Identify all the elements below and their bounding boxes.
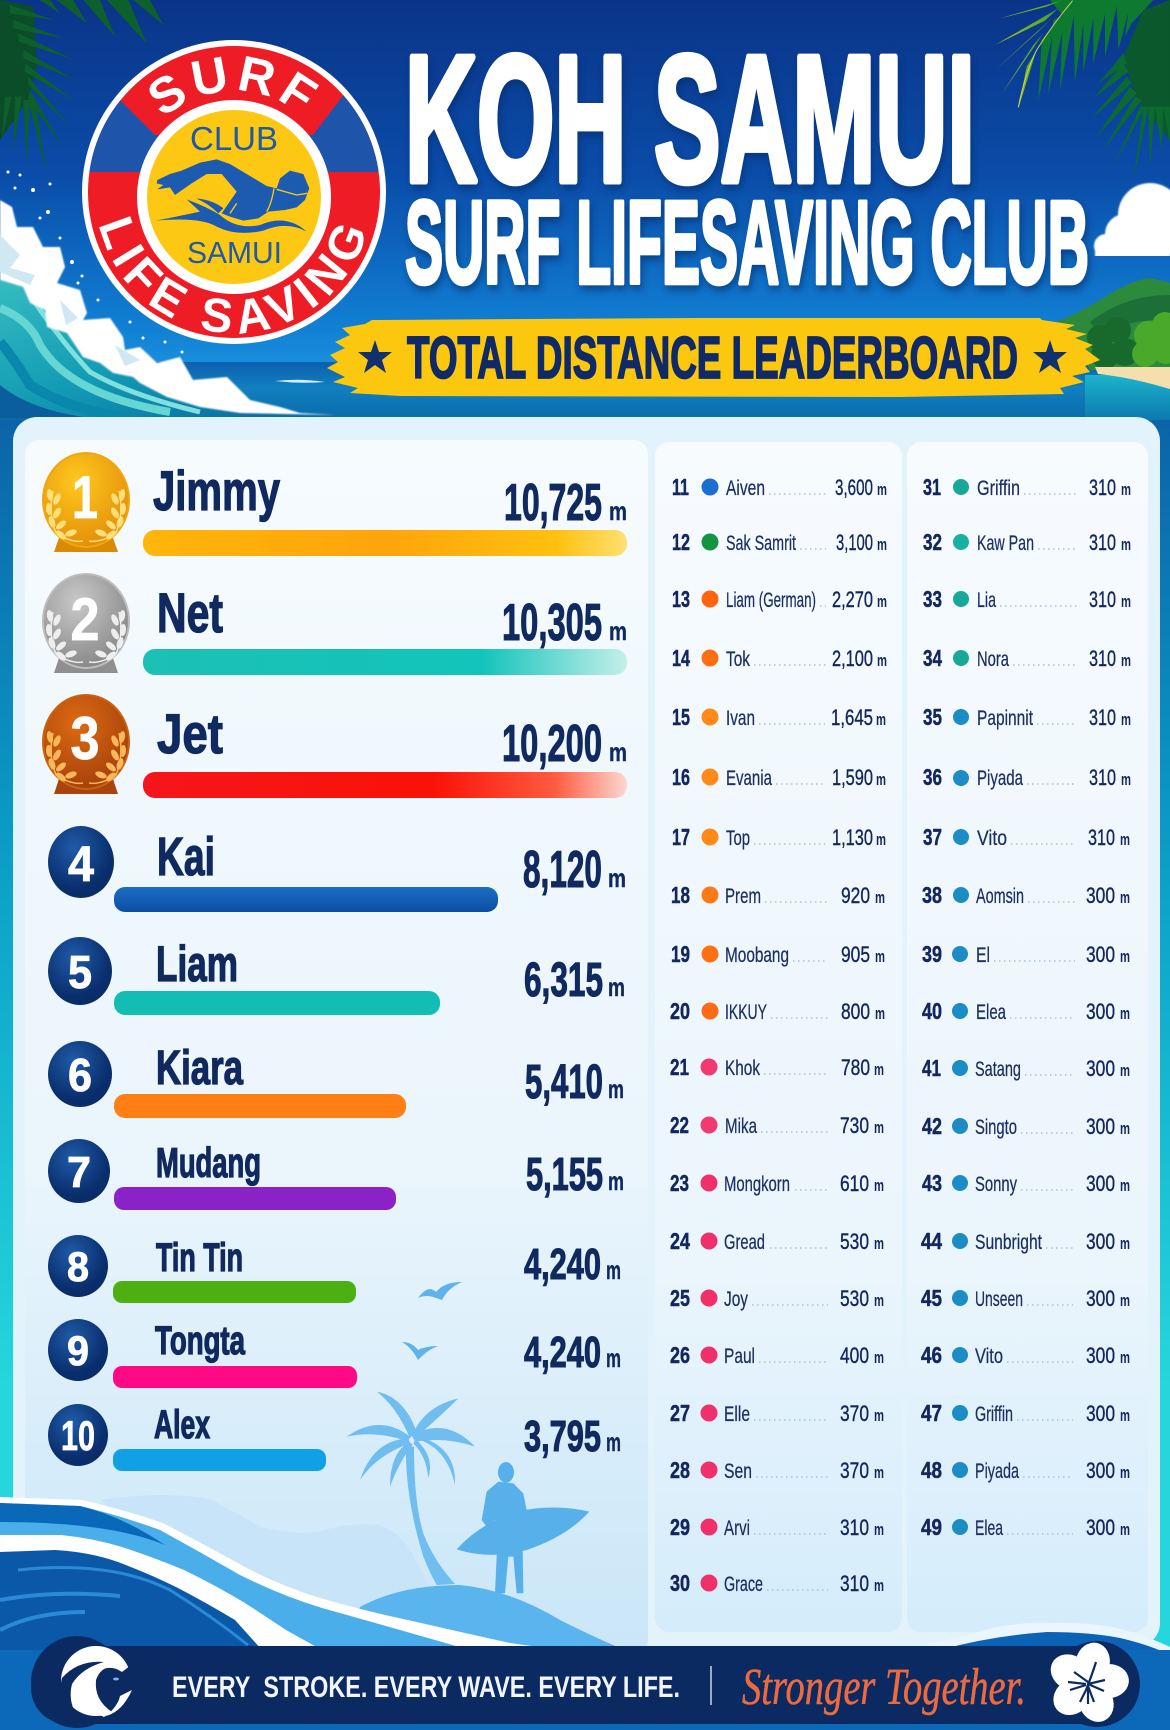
row 30 Grace: 310 xyxy=(840,1571,869,1596)
row 35 Papinnit: 310 xyxy=(1089,705,1116,730)
row 27 Elle: m xyxy=(874,1406,884,1425)
row 48 Piyada: 48 xyxy=(921,1457,942,1483)
silhouette: palm tree xyxy=(347,1392,475,1585)
row 11 Aiven: Aiven xyxy=(726,477,765,500)
row 23 Mongkorn: m xyxy=(874,1176,884,1195)
row 44 Sunbright: 300 xyxy=(1086,1229,1115,1254)
row 25 Joy: 25 xyxy=(670,1285,690,1311)
icon: swimmer xyxy=(156,159,309,233)
star left xyxy=(358,340,392,373)
player row: rank 9 Tongta xyxy=(48,1319,621,1388)
icon: birds xyxy=(402,1282,462,1360)
player row: Jet: m xyxy=(609,737,627,767)
row 28 Sen xyxy=(670,1457,884,1483)
row 29 Arvi: m xyxy=(874,1520,884,1539)
row 28 Sen: 370 xyxy=(840,1458,869,1483)
row 12 Sak Samrit: m xyxy=(877,535,887,554)
row 18 Prem xyxy=(671,882,885,908)
row 40 Elea xyxy=(922,998,1130,1024)
icon: wave logo xyxy=(61,1646,140,1718)
row 20 IKKUY: 800 xyxy=(841,999,870,1024)
row 38 Aomsin: Aomsin xyxy=(976,885,1024,908)
player row: rank 9 Tongta: m xyxy=(606,1343,621,1373)
row 24 Gread: Gread xyxy=(724,1231,765,1254)
row 33 Lia: m xyxy=(1121,592,1131,611)
row 39 El: 39 xyxy=(922,941,942,967)
row 39 El: 300 xyxy=(1086,942,1115,967)
row 12 Sak Samrit: 3,100 xyxy=(836,530,873,555)
row 26 Paul xyxy=(670,1342,884,1368)
medal: silver rank 2 xyxy=(43,574,129,673)
player row: rank 9 Tongta: Tongta xyxy=(155,1319,246,1363)
row 13 Liam (German): m xyxy=(877,592,887,611)
row 16 Evania: m xyxy=(876,770,886,789)
row 42 Singto: m xyxy=(1120,1119,1130,1138)
banner: total distance leaderboard xyxy=(327,318,1100,397)
row 38 Aomsin: m xyxy=(1120,888,1130,907)
row 29 Arvi xyxy=(670,1514,884,1540)
player row: rank 9 Tongta: 4,240 xyxy=(524,1328,601,1377)
row 42 Singto: Singto xyxy=(975,1116,1017,1139)
row 21 Khok: m xyxy=(874,1060,884,1079)
row 16 Evania: 1,590 xyxy=(832,765,873,790)
player row: rank 8 Tin Tin: 8 xyxy=(67,1243,89,1290)
row 25 Joy: m xyxy=(874,1291,884,1310)
row 26 Paul: m xyxy=(874,1348,884,1367)
row 34 Nora: Nora xyxy=(977,648,1009,671)
row 24 Gread xyxy=(670,1228,884,1254)
row 25 Joy: 530 xyxy=(840,1286,869,1311)
row 21 Khok: 21 xyxy=(670,1054,689,1080)
row 15 Ivan xyxy=(672,704,886,730)
row 18 Prem: 920 xyxy=(841,883,870,908)
row 44 Sunbright: m xyxy=(1120,1234,1130,1253)
row 19 Moobang: m xyxy=(875,947,885,966)
row 32 Kaw Pan: 310 xyxy=(1089,530,1116,555)
row 44 Sunbright: 44 xyxy=(921,1228,942,1254)
player row: rank 10 Alex: Alex xyxy=(154,1403,210,1447)
row 24 Gread: 530 xyxy=(840,1229,869,1254)
row 13 Liam (German): 13 xyxy=(672,586,690,612)
row 28 Sen: m xyxy=(874,1463,884,1482)
row 25 Joy: Joy xyxy=(724,1288,748,1311)
row 35 Papinnit: Papinnit xyxy=(977,707,1033,730)
row 43 Sonny xyxy=(922,1170,1130,1196)
player row: rank 6 Kiara: 5,410 xyxy=(525,1056,603,1109)
player row: rank 6 Kiara: m xyxy=(608,1074,624,1104)
footer slogan: EVERY STROKE. EVERY WAVE. EVERY LIFE. xyxy=(172,1671,680,1704)
list rows: ranks 11 to 30 xyxy=(670,474,887,1596)
player row: Jet xyxy=(143,702,627,798)
row 19 Moobang: Moobang xyxy=(725,944,789,967)
row 45 Unseen: 300 xyxy=(1086,1286,1115,1311)
row 24 Gread: 24 xyxy=(670,1228,690,1254)
row 37 Vito: Vito xyxy=(977,827,1007,850)
row 31 Griffin: 31 xyxy=(923,474,941,500)
row 42 Singto: 300 xyxy=(1086,1114,1115,1139)
row 13 Liam (German): Liam (German) xyxy=(726,589,816,612)
player row: rank 5 Liam: m xyxy=(608,972,625,1002)
row 45 Unseen: m xyxy=(1120,1291,1130,1310)
row 12 Sak Samrit xyxy=(672,529,887,555)
row 45 Unseen xyxy=(921,1285,1130,1311)
row 27 Elle: 27 xyxy=(670,1400,690,1426)
row 19 Moobang: 19 xyxy=(671,941,690,967)
row 26 Paul: 26 xyxy=(670,1342,690,1368)
list rows: ranks 31 to 49 xyxy=(921,474,1131,1540)
player row: rank 4 Kai xyxy=(48,826,626,912)
row 44 Sunbright: Sunbright xyxy=(975,1231,1042,1254)
row 46 Vito: Vito xyxy=(975,1345,1003,1368)
row 33 Lia: Lia xyxy=(977,589,996,612)
row 16 Evania: 16 xyxy=(672,764,690,790)
row 18 Prem: m xyxy=(875,888,885,907)
row 47 Griffin: 300 xyxy=(1086,1401,1115,1426)
row 14 Tok: Tok xyxy=(726,648,750,671)
row 33 Lia xyxy=(923,586,1131,612)
player row: rank 8 Tin Tin: Tin Tin xyxy=(156,1236,243,1280)
medal: gold rank 1 xyxy=(43,453,129,552)
row 47 Griffin: Griffin xyxy=(975,1403,1013,1426)
row 15 Ivan: m xyxy=(876,710,886,729)
row 42 Singto: 42 xyxy=(922,1113,942,1139)
row 24 Gread: m xyxy=(874,1234,884,1253)
row 30 Grace: m xyxy=(874,1576,884,1595)
player row: Net xyxy=(143,581,627,675)
player row: rank 5 Liam: 5 xyxy=(68,946,92,998)
row 23 Mongkorn xyxy=(670,1170,884,1196)
silhouette: surfer with board xyxy=(457,1462,589,1593)
row 36 Piyada: Piyada xyxy=(977,767,1023,790)
row 41 Satang: Satang xyxy=(975,1058,1021,1081)
row 17 Top: Top xyxy=(726,827,750,850)
row 12 Sak Samrit: 12 xyxy=(672,529,690,555)
player row: rank 10 Alex: 3,795 xyxy=(524,1412,601,1461)
row 13 Liam (German) xyxy=(672,586,887,612)
player row: Jimmy xyxy=(143,459,627,556)
row 47 Griffin xyxy=(921,1400,1130,1426)
cloud xyxy=(1094,183,1170,260)
row 23 Mongkorn: 23 xyxy=(670,1170,689,1196)
player row: rank 4 Kai: m xyxy=(608,863,626,893)
logo ring text: surf: SURF xyxy=(150,56,319,113)
row 39 El: m xyxy=(1120,947,1130,966)
player row: rank 7 Mudang: 5,155 xyxy=(526,1148,603,1200)
row 15 Ivan: 15 xyxy=(672,704,690,730)
row 11 Aiven xyxy=(672,474,887,500)
row 31 Griffin: Griffin xyxy=(977,477,1020,500)
player row: Jimmy: Jimmy xyxy=(153,459,280,522)
row 23 Mongkorn: Mongkorn xyxy=(724,1173,790,1196)
row 45 Unseen: Unseen xyxy=(975,1288,1023,1311)
row 34 Nora: 310 xyxy=(1089,646,1116,671)
row 27 Elle: 370 xyxy=(840,1401,869,1426)
row 26 Paul: Paul xyxy=(724,1345,755,1368)
row 28 Sen: Sen xyxy=(724,1460,752,1483)
row 22 Mika: Mika xyxy=(725,1115,757,1138)
player row: rank 10 Alex: 10 xyxy=(61,1412,95,1459)
row 16 Evania: Evania xyxy=(726,767,772,790)
row 42 Singto xyxy=(922,1113,1130,1139)
row 17 Top: 17 xyxy=(672,824,690,850)
row 17 Top xyxy=(672,824,886,850)
row 48 Piyada: Piyada xyxy=(975,1460,1019,1483)
panel: top ten xyxy=(25,440,648,1655)
row 48 Piyada: 300 xyxy=(1086,1458,1115,1483)
row 43 Sonny: 43 xyxy=(922,1170,942,1196)
silhouette: island xyxy=(340,1585,625,1650)
player row: rank 8 Tin Tin xyxy=(48,1235,621,1303)
row 46 Vito xyxy=(921,1342,1130,1368)
player row: rank 10 Alex: m xyxy=(606,1427,621,1457)
scene: distant hills xyxy=(100,1495,560,1650)
player row: rank 6 Kiara: Kiara xyxy=(156,1042,243,1095)
row 19 Moobang xyxy=(671,941,885,967)
player row: rank 8 Tin Tin: m xyxy=(606,1255,621,1285)
player row: rank 4 Kai: 8,120 xyxy=(523,841,602,899)
row 37 Vito: 310 xyxy=(1088,825,1115,850)
row 35 Papinnit: 35 xyxy=(923,704,942,730)
row 32 Kaw Pan: 32 xyxy=(923,529,942,555)
row 33 Lia: 33 xyxy=(923,586,942,612)
row 37 Vito: 37 xyxy=(923,824,942,850)
row 49 Elea: 49 xyxy=(921,1514,942,1540)
row 36 Piyada: m xyxy=(1121,770,1131,789)
row 25 Joy xyxy=(670,1285,884,1311)
palm fronds: top right xyxy=(995,0,1170,182)
row 46 Vito: m xyxy=(1120,1348,1130,1367)
row 49 Elea: m xyxy=(1120,1520,1130,1539)
player row: rank 6 Kiara: 6 xyxy=(68,1049,92,1101)
row 26 Paul: 400 xyxy=(840,1343,869,1368)
row 32 Kaw Pan: Kaw Pan xyxy=(977,532,1034,555)
row 32 Kaw Pan: m xyxy=(1121,535,1131,554)
island hill xyxy=(1057,278,1170,389)
club logo xyxy=(82,40,386,344)
row 20 IKKUY xyxy=(670,998,885,1024)
player row: rank 7 Mudang: Mudang xyxy=(156,1139,261,1186)
row 41 Satang: m xyxy=(1120,1061,1130,1080)
player row: Jimmy: m xyxy=(609,496,627,526)
player row: rank 5 Liam: 6,315 xyxy=(524,954,603,1007)
player row: rank 5 Liam: Liam xyxy=(156,936,238,992)
row 22 Mika: m xyxy=(874,1118,884,1137)
row 15 Ivan: Ivan xyxy=(726,707,755,730)
player row: Net: Net xyxy=(157,581,223,644)
player row: Net: m xyxy=(609,616,627,646)
row 48 Piyada: m xyxy=(1120,1463,1130,1482)
row 31 Griffin xyxy=(923,474,1131,500)
panel: outer board xyxy=(13,417,1160,1655)
row 29 Arvi: 310 xyxy=(840,1515,869,1540)
row 21 Khok: 780 xyxy=(841,1055,870,1080)
row 29 Arvi: Arvi xyxy=(724,1517,750,1540)
sea horizon xyxy=(0,362,1170,420)
crashing wave xyxy=(0,170,345,418)
row 14 Tok: 2,100 xyxy=(832,646,873,671)
player row: rank 10 Alex xyxy=(48,1403,621,1471)
row 22 Mika: 22 xyxy=(670,1112,689,1138)
row 30 Grace: Grace xyxy=(724,1573,763,1596)
row 23 Mongkorn: 610 xyxy=(840,1171,869,1196)
row 12 Sak Samrit: Sak Samrit xyxy=(726,532,796,555)
row 27 Elle: Elle xyxy=(724,1403,750,1426)
row 40 Elea: 300 xyxy=(1086,999,1115,1024)
row 44 Sunbright xyxy=(921,1228,1130,1254)
row 49 Elea: 300 xyxy=(1086,1515,1115,1540)
row 48 Piyada xyxy=(921,1457,1130,1483)
row 20 IKKUY: m xyxy=(875,1004,885,1023)
row 41 Satang: 41 xyxy=(922,1055,941,1081)
row 36 Piyada: 310 xyxy=(1089,765,1116,790)
row 13 Liam (German): 2,270 xyxy=(832,587,873,612)
row 21 Khok xyxy=(670,1054,884,1080)
panel: ranks 31-49 xyxy=(907,442,1148,1632)
row 36 Piyada: 36 xyxy=(923,764,942,790)
logo text: samui: SAMUI xyxy=(187,235,282,270)
row 11 Aiven: m xyxy=(877,480,887,499)
row 15 Ivan: 1,645 xyxy=(831,705,873,730)
row 38 Aomsin: 300 xyxy=(1086,883,1115,908)
row 38 Aomsin xyxy=(922,882,1130,908)
footer script tagline: Stronger Together. xyxy=(742,1659,1026,1716)
row 43 Sonny: Sonny xyxy=(975,1173,1017,1196)
medal: bronze rank 3 xyxy=(43,695,129,794)
row 14 Tok xyxy=(672,645,887,671)
row 47 Griffin: 47 xyxy=(921,1400,942,1426)
footer divider xyxy=(710,1666,712,1705)
row 30 Grace: 30 xyxy=(670,1570,690,1596)
bottom strip xyxy=(0,1650,1170,1730)
row 35 Papinnit: m xyxy=(1121,710,1131,729)
medal: gold rank 1: 1 xyxy=(72,464,98,531)
player row: rank 9 Tongta: 9 xyxy=(67,1327,89,1374)
player row: rank 4 Kai: Kai xyxy=(157,827,215,887)
logo text: club: CLUB xyxy=(190,120,278,157)
row 40 Elea: Elea xyxy=(976,1001,1006,1024)
row 27 Elle xyxy=(670,1400,884,1426)
row 37 Vito xyxy=(923,824,1130,850)
row 40 Elea: m xyxy=(1120,1004,1130,1023)
row 46 Vito: 300 xyxy=(1086,1343,1115,1368)
player row: rank 7 Mudang: 7 xyxy=(67,1148,91,1197)
player row: Jet: 10,200 xyxy=(502,715,602,773)
palm fronds: top left xyxy=(0,0,163,173)
row 41 Satang xyxy=(922,1055,1130,1081)
row 40 Elea: 40 xyxy=(922,998,942,1024)
player row: Net: 10,305 xyxy=(502,594,602,652)
row 49 Elea xyxy=(921,1514,1130,1540)
player row: rank 8 Tin Tin: 4,240 xyxy=(524,1240,601,1289)
row 21 Khok: Khok xyxy=(725,1057,760,1080)
row 28 Sen: 28 xyxy=(670,1457,690,1483)
row 30 Grace xyxy=(670,1570,884,1596)
row 17 Top: m xyxy=(876,830,886,849)
player row: rank 5 Liam xyxy=(48,936,625,1015)
bottom waves: left xyxy=(0,1497,560,1730)
logo ring text: life saving: LIFE SAVING xyxy=(99,216,364,334)
row 14 Tok: m xyxy=(877,651,887,670)
row 22 Mika: 730 xyxy=(840,1113,869,1138)
row 16 Evania xyxy=(672,764,886,790)
medal: silver rank 2: 2 xyxy=(70,586,100,653)
row 18 Prem: Prem xyxy=(725,885,761,908)
row 46 Vito: 46 xyxy=(921,1342,942,1368)
row 34 Nora: m xyxy=(1121,651,1131,670)
row 43 Sonny: m xyxy=(1120,1176,1130,1195)
row 11 Aiven: 3,600 xyxy=(835,475,873,500)
row 18 Prem: 18 xyxy=(671,882,690,908)
row 34 Nora: 34 xyxy=(923,645,942,671)
medal: bronze rank 3: 3 xyxy=(70,705,100,772)
icon: hibiscus xyxy=(1044,1639,1130,1727)
row 14 Tok: 14 xyxy=(672,645,690,671)
row 39 El: El xyxy=(976,944,990,967)
footer bar xyxy=(31,1636,1140,1728)
player row: Jimmy: 10,725 xyxy=(504,474,602,532)
row 38 Aomsin: 38 xyxy=(922,882,942,908)
row 39 El xyxy=(922,941,1130,967)
row 37 Vito: m xyxy=(1120,830,1130,849)
row 11 Aiven: 11 xyxy=(672,474,689,500)
player row: rank 6 Kiara xyxy=(48,1041,624,1118)
row 34 Nora xyxy=(923,645,1131,671)
row 41 Satang: 300 xyxy=(1086,1056,1115,1081)
row 22 Mika xyxy=(670,1112,884,1138)
row 49 Elea: Elea xyxy=(975,1517,1003,1540)
row 20 IKKUY: IKKUY xyxy=(725,1001,767,1024)
row 31 Griffin: 310 xyxy=(1089,475,1116,500)
row 43 Sonny: 300 xyxy=(1086,1171,1115,1196)
row 35 Papinnit xyxy=(923,704,1131,730)
player row: rank 7 Mudang: m xyxy=(608,1166,624,1196)
row 20 IKKUY: 20 xyxy=(670,998,690,1024)
row 47 Griffin: m xyxy=(1120,1406,1130,1425)
star right xyxy=(1033,340,1067,373)
row 33 Lia: 310 xyxy=(1089,587,1116,612)
row 17 Top: 1,130 xyxy=(832,825,873,850)
row 19 Moobang: 905 xyxy=(841,942,870,967)
panel: ranks 11-30 xyxy=(655,442,902,1632)
player row: Jet: Jet xyxy=(157,702,223,765)
row 45 Unseen: 45 xyxy=(921,1285,942,1311)
bottom waves: right xyxy=(900,1623,1170,1730)
row 32 Kaw Pan xyxy=(923,529,1131,555)
player row: rank 4 Kai: 4 xyxy=(68,836,94,892)
row 31 Griffin: m xyxy=(1121,480,1131,499)
player row: rank 7 Mudang xyxy=(48,1139,624,1210)
row 29 Arvi: 29 xyxy=(670,1514,690,1540)
row 36 Piyada xyxy=(923,764,1131,790)
